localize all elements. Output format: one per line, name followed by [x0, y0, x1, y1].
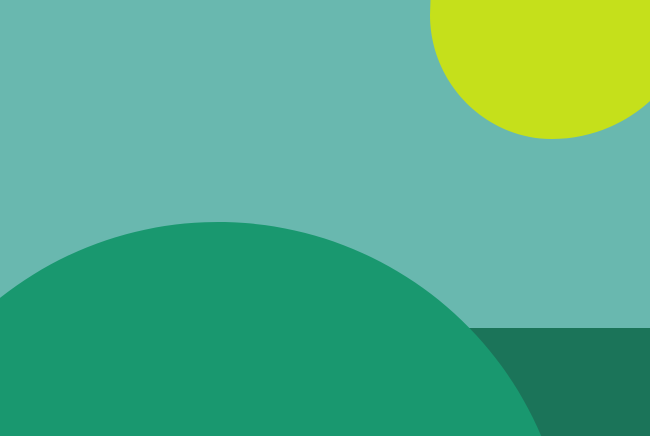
dark green ground — [400, 328, 650, 436]
sun — [430, 0, 650, 139]
green hill — [0, 222, 541, 436]
